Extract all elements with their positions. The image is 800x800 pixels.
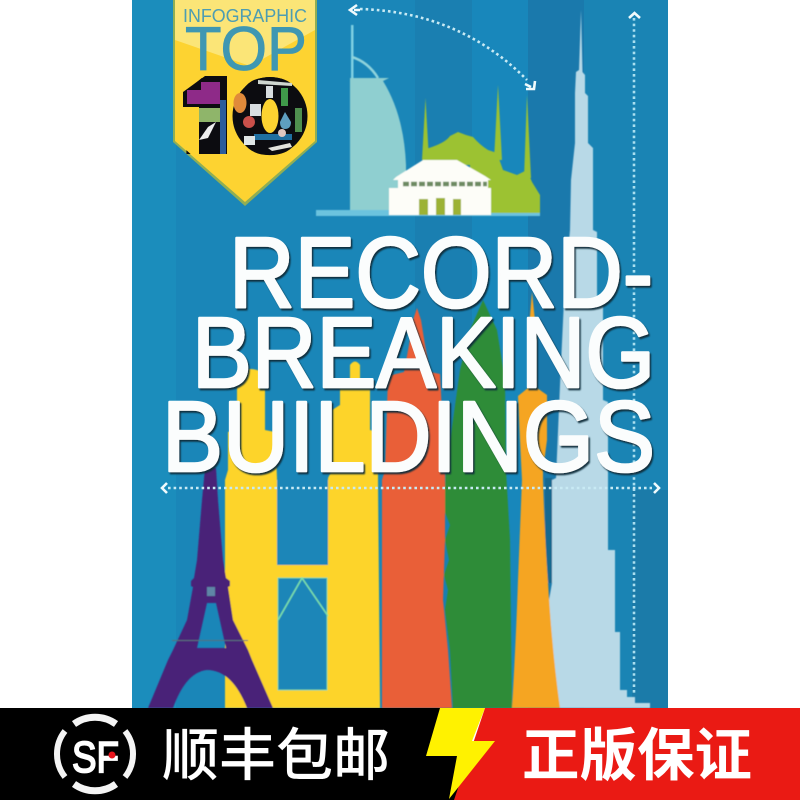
badge number: 0: [232, 55, 308, 178]
arrow: curved dotted arc: [350, 5, 535, 89]
building: Burj Al Arab: [316, 25, 540, 216]
badge number: 1: [181, 55, 229, 178]
arrow: vertical height line: [629, 13, 640, 695]
banner: red guarantee panel: [454, 708, 800, 800]
building: Burj Khalifa: [530, 10, 650, 708]
title: BUILDINGS: [162, 381, 655, 493]
badge highlight: [175, 0, 315, 66]
icon: SF Express logo: SF: [72, 733, 119, 782]
building: green mosque: [422, 85, 540, 213]
cover background: [132, 0, 668, 708]
badge word: TOP: [185, 15, 307, 84]
building: yellow twin towers: [225, 362, 380, 708]
building: white pavilion: [389, 160, 491, 215]
badge label: INFOGRAPHIC: [183, 6, 307, 26]
arrow: horizontal width line: [162, 483, 659, 493]
badge: Infographic Top 10: [173, 0, 317, 206]
building: orange supertall tower: [512, 292, 560, 708]
building: dark blue tower strip: [545, 478, 552, 583]
title: BREAKING: [192, 297, 655, 409]
building: purple Eiffel Tower: [148, 468, 273, 708]
title: RECORD-: [229, 217, 653, 329]
skyline illustration: [148, 10, 650, 708]
badge shape: [173, 0, 317, 206]
title: [162, 217, 655, 493]
badge number collage: [187, 80, 302, 154]
badge number: [181, 55, 308, 178]
banner text: genuine guarantee: 正版保证: [522, 710, 752, 792]
building: green tower: [444, 300, 512, 708]
banner: black shipping panel: [0, 708, 460, 800]
building: orange-red Taipei tower: [382, 308, 452, 708]
banner text: shipping: 顺丰包邮: [162, 710, 390, 792]
icon: lightning bolt: [426, 708, 495, 799]
skybridge window: [278, 578, 328, 690]
icon: SF Express logo: [57, 717, 133, 791]
